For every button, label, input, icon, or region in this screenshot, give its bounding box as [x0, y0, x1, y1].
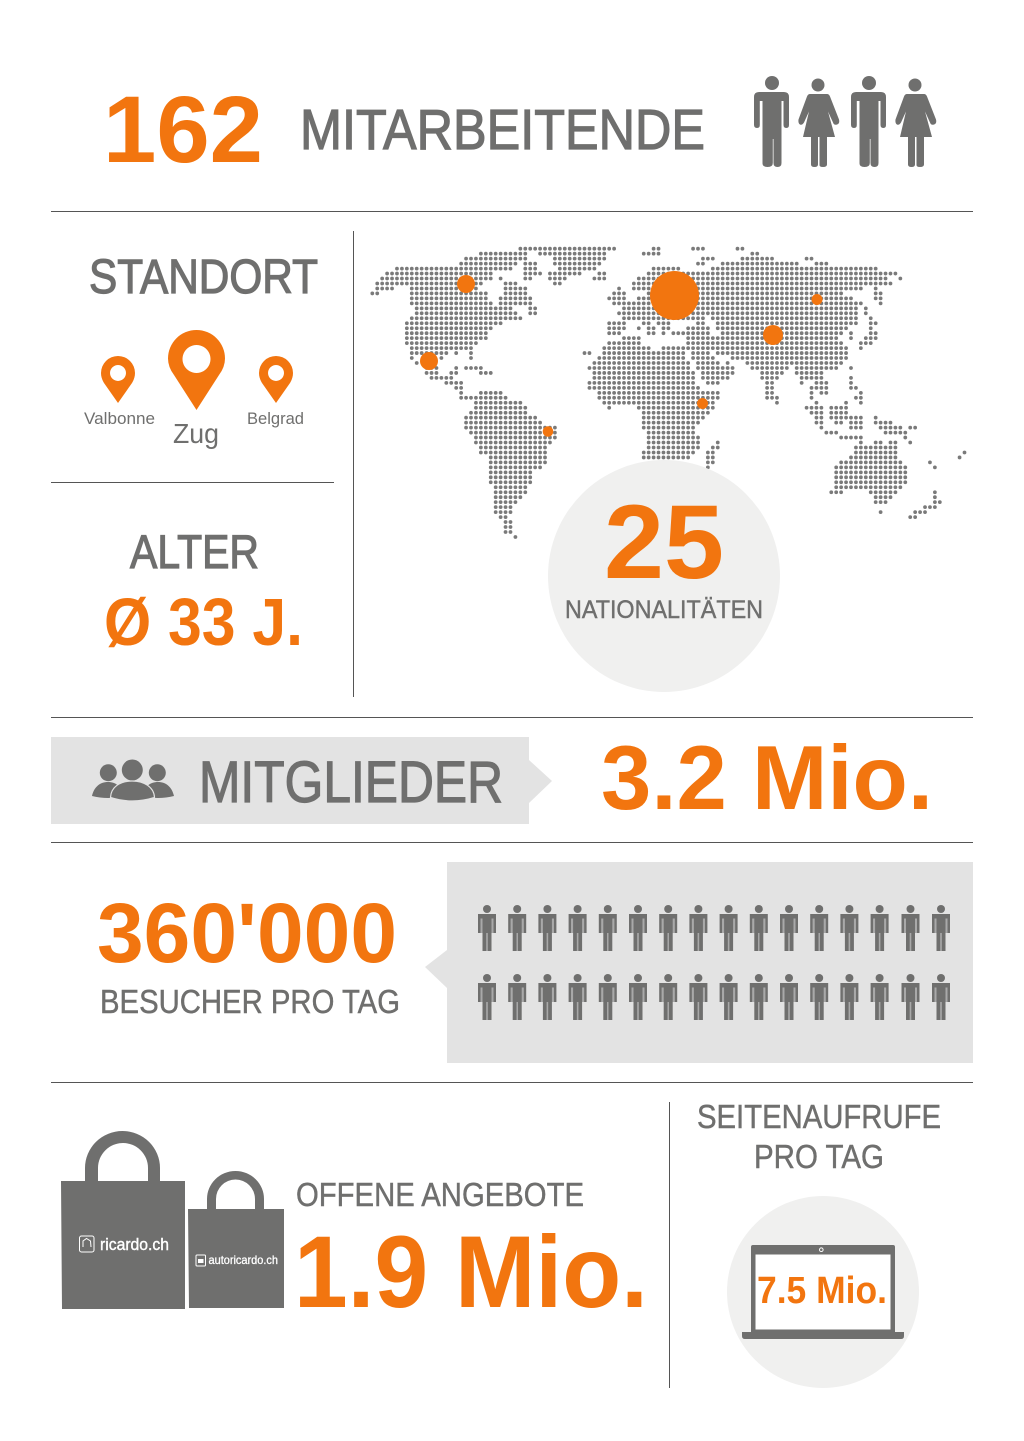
icon: Belgrad pin [259, 356, 293, 403]
icon: autoricardo.ch bag [188, 1171, 284, 1308]
icon: group of people [92, 760, 174, 801]
heading: Seitenaufrufe pro Tag [697, 1098, 941, 1175]
label: Offene Angebote: OFFENE ANGEBOTE [296, 1176, 584, 1213]
section: page views [697, 1098, 941, 1388]
value: 3.2 Mio.: 3.2 Mio. [601, 728, 933, 829]
dotted world map [372, 249, 965, 537]
label: Valbonne: Valbonne [84, 409, 155, 428]
icon: ricardo.ch bag [61, 1131, 185, 1309]
icon: autoricardo.ch bag: autoricardo.ch [208, 1253, 278, 1267]
callout: 25 Nationalitäten [548, 460, 780, 692]
circle background [727, 1196, 919, 1388]
heading: Seitenaufrufe pro Tag: PRO TAG [754, 1138, 884, 1175]
icon: laptop [742, 1245, 904, 1339]
panel: Alter [104, 525, 303, 660]
headline: 162 Mitarbeitende [103, 76, 936, 183]
banner: Mitglieder [51, 737, 552, 824]
banner background with arrow [51, 737, 552, 824]
number: 25: 25 [604, 484, 724, 601]
label: Besucher pro Tag: BESUCHER PRO TAG [100, 983, 400, 1020]
section: open offers [61, 1131, 648, 1329]
number: 162: 162 [103, 77, 263, 183]
icon: ricardo.ch bag: ricardo.ch [100, 1235, 169, 1254]
heading: Alter: ALTER [130, 525, 259, 578]
value: 7.5 Mio.: 7.5 Mio. [757, 1270, 887, 1312]
icon: Valbonne pin [101, 356, 135, 403]
heading: Seitenaufrufe pro Tag: SEITENAUFRUFE [697, 1098, 941, 1135]
callout circle [548, 460, 780, 692]
heading: Mitglieder: MITGLIEDER [199, 750, 503, 815]
map markers [420, 271, 822, 437]
label: Belgrad: Belgrad [247, 409, 304, 428]
value: 360'000: 360'000 [97, 886, 397, 980]
value: average age: Ø 33 J. [104, 585, 303, 660]
panel: Standort [84, 251, 318, 449]
heading: Mitarbeitende: MITARBEITENDE [300, 98, 705, 162]
icon: Zug pin [168, 330, 225, 410]
icon: staff figures [754, 76, 936, 167]
section: visitors per day [97, 862, 973, 1063]
panel: figures with arrow [425, 862, 973, 1063]
map dots [372, 249, 965, 537]
pictogram: rows of visitors [478, 905, 950, 1020]
label: Zug: Zug [173, 418, 219, 449]
value: 1.9 Mio.: 1.9 Mio. [294, 1215, 648, 1329]
heading: Standort: STANDORT [89, 251, 318, 304]
label: Nationalitäten: NATIONALITÄTEN [565, 596, 763, 624]
